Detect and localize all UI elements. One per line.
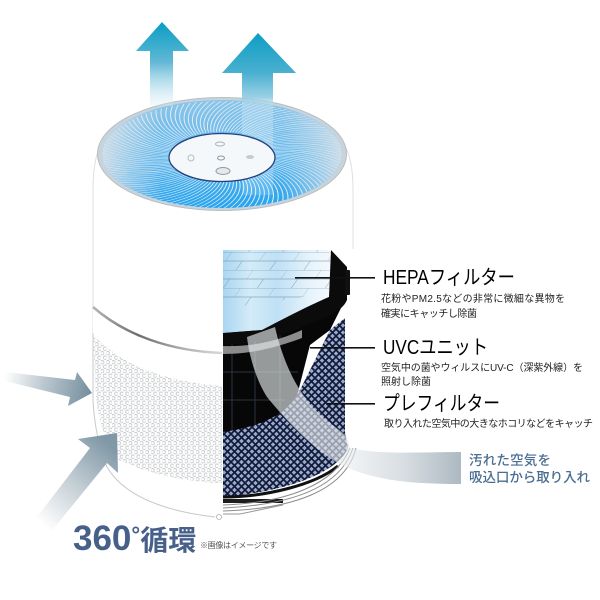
top air outlet fan grille: [96, 98, 348, 212]
cutaway: UVC unit black core: [223, 297, 345, 432]
housing seam line: [93, 307, 222, 353]
arrow: right rising clean air: [222, 33, 296, 195]
arrow: left rising clean air: [136, 22, 189, 106]
cutaway: bottom base rings: [223, 448, 356, 514]
heading: 360 degree circulation: 360: [73, 519, 131, 558]
leader line: UVC: [310, 347, 375, 349]
note: image disclaimer: ※画像はイメージです: [200, 540, 277, 550]
text: UVC description: 照射し除菌: [381, 375, 431, 388]
HEPA filter clasp: [345, 270, 350, 295]
text: pre-filter description: 取り入れた空気中の大きなホコリなどをキャッチ: [384, 417, 593, 430]
callout: dirty air intake: 吸込口から取り入れ: [469, 470, 590, 485]
cutaway: pre-filter mesh: [223, 318, 348, 497]
heading: pre-filter: プレフィルター: [383, 392, 500, 415]
callout: dirty air intake: 汚れた空気を: [469, 453, 551, 468]
heading: 360 degree circulation: 循環: [140, 525, 196, 556]
leader line: pre-filter: [327, 403, 375, 405]
text: HEPA description: 確実にキャッチし除菌: [381, 307, 477, 320]
control panel: [169, 134, 275, 182]
text: HEPA description: 花粉やPM2.5などの非常に微細な異物を: [381, 292, 565, 305]
arrow: lower left intake: [37, 433, 118, 533]
lower intake housing with perforations: [93, 307, 222, 520]
heading: UVC unit: UVCユニット: [383, 337, 488, 359]
heading: 360 degree circulation: °: [131, 522, 140, 547]
leader line: HEPA: [295, 277, 375, 279]
cutaway: HEPA filter: [223, 250, 347, 345]
arrow: intake air band through filter: [247, 327, 461, 484]
heading: HEPA filter: HEPAフィルター: [383, 266, 515, 289]
text: UVC description: 空気中の菌やウィルスにUV-C（深紫外線）を: [381, 361, 583, 374]
purifier body upper housing: [93, 146, 353, 353]
arrow: upper left intake: [5, 372, 92, 406]
grey band on black ring: [223, 330, 302, 354]
